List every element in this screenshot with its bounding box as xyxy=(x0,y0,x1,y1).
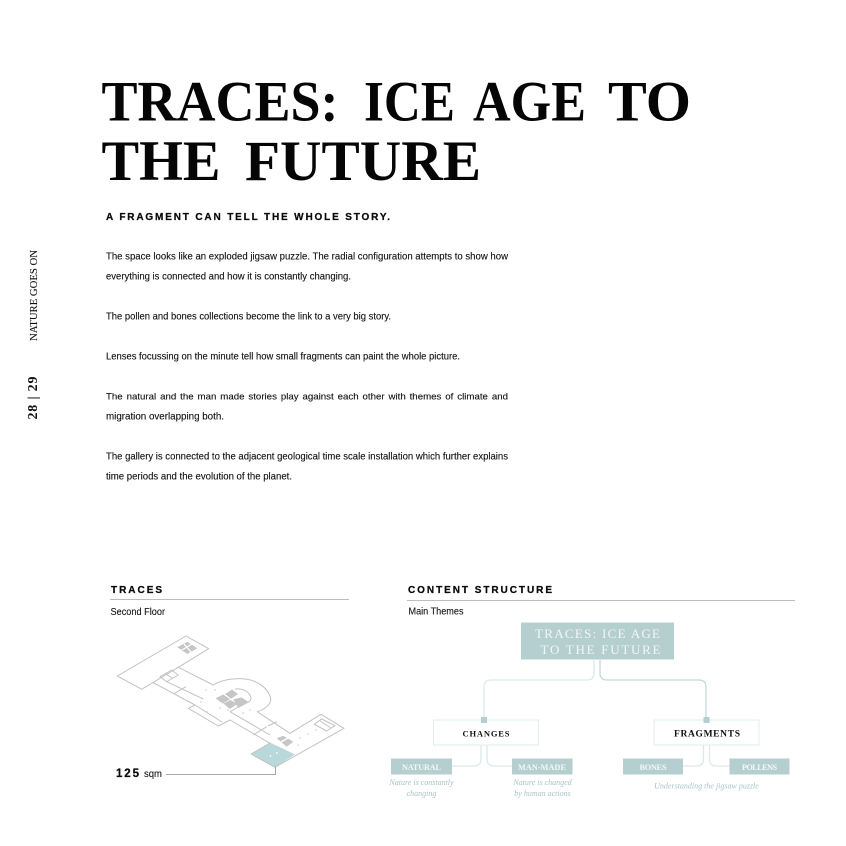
tag: natural: NATURAL xyxy=(402,763,442,772)
subheading: A FRAGMENT CAN TELL THE WHOLE STORY. xyxy=(106,212,390,223)
title xyxy=(102,70,691,193)
box: fragments: FRAGMENTS xyxy=(674,730,740,740)
side label: nature goes on: NATURE GOES ON xyxy=(29,250,40,341)
title: TRACES: xyxy=(102,70,338,134)
caption: natural xyxy=(388,778,454,798)
body text: The gallery is connected to the adjacent geological time scale installation which further explains xyxy=(106,452,508,462)
caption: fragments: Understanding the jigsaw puzzle xyxy=(654,782,759,790)
floor plan map xyxy=(117,636,344,767)
body text xyxy=(106,252,509,482)
tag: bones xyxy=(623,758,683,774)
caption: man-made xyxy=(512,778,573,798)
area value: 125 sqm xyxy=(116,767,276,780)
title: TO xyxy=(608,70,691,134)
body text: everything is connected and how it is constantly changing. xyxy=(106,272,351,282)
caption: man-made: by human actions xyxy=(514,789,571,798)
title: ICE xyxy=(364,70,455,134)
body text: migration overlapping both. xyxy=(106,412,224,422)
root box: traces xyxy=(521,622,674,660)
connector lines xyxy=(452,660,730,766)
body text: Lenses focussing on the minute tell how small fragments can paint the whole picture. xyxy=(106,352,460,362)
box: changes: CHANGES xyxy=(462,728,510,738)
heading: content structure: CONTENT STRUCTURE xyxy=(408,585,552,596)
root box: traces: TO THE FUTURE xyxy=(540,642,661,657)
body text: time periods and the evolution of the planet. xyxy=(106,472,292,482)
root box: traces: TRACES: ICE AGE xyxy=(535,626,660,641)
title: FUTURE xyxy=(245,130,481,193)
caption: natural: changing xyxy=(407,789,436,798)
heading: traces: TRACES xyxy=(111,585,162,596)
tag: pollens: POLLENS xyxy=(742,763,777,772)
body text: The natural and the man made stories play against each other with themes of climate and xyxy=(106,392,508,402)
tag: natural xyxy=(391,758,452,774)
subheading: second floor: Second Floor xyxy=(110,607,166,618)
tag: man-made: MAN-MADE xyxy=(518,763,567,772)
panel: content structure xyxy=(388,585,795,798)
area value: 125 sqm: sqm xyxy=(144,769,162,780)
box: changes xyxy=(434,717,538,745)
panel: traces floor plan xyxy=(110,585,349,780)
page numbers: 28 | 29 xyxy=(26,376,41,420)
box: fragments xyxy=(654,717,759,745)
body text: The space looks like an exploded jigsaw puzzle. The radial configuration attempts to show how xyxy=(106,252,509,262)
body text: The pollen and bones collections become the link to a very big story. xyxy=(106,312,391,322)
tag: bones: BONES xyxy=(640,763,667,772)
tag: man-made xyxy=(512,758,572,774)
title: THE xyxy=(102,130,220,193)
subheading: main themes: Main Themes xyxy=(408,606,464,618)
title: AGE xyxy=(473,70,586,134)
caption: natural: Nature is constantly xyxy=(388,778,454,787)
tag: pollens xyxy=(730,758,790,774)
caption: man-made: Nature is changed xyxy=(512,778,573,787)
area value: 125 sqm: 125 xyxy=(116,768,140,780)
